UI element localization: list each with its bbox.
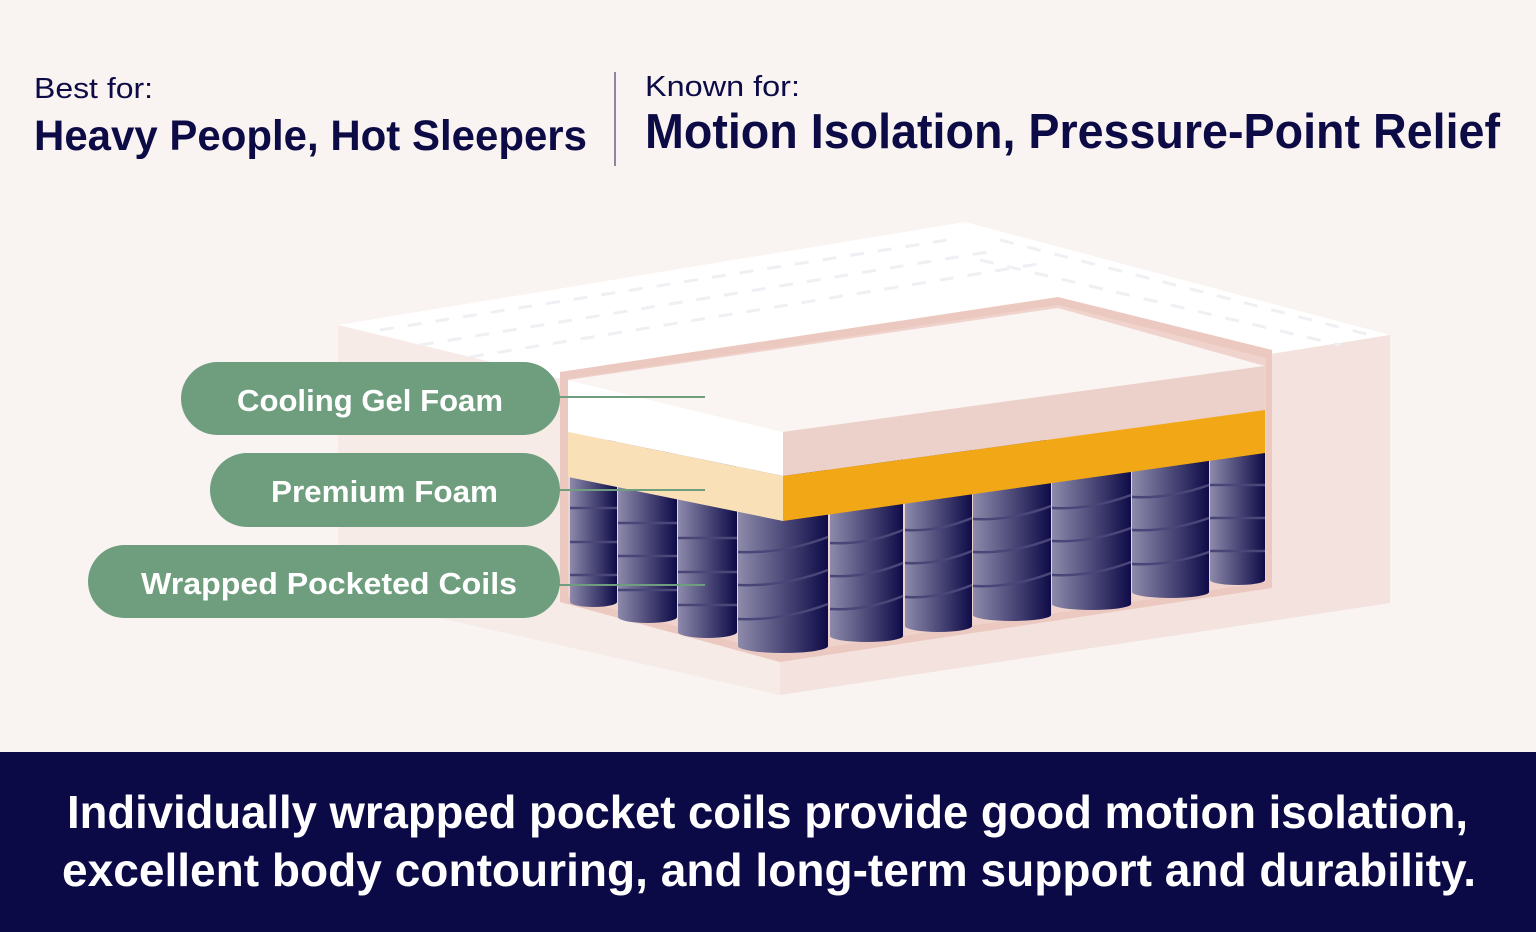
label: cooling gel foam: Cooling Gel Foam xyxy=(237,383,503,418)
header: best for: Best for: xyxy=(34,73,153,105)
header: known for: Motion Isolation, Pressure-Point Relief xyxy=(645,105,1501,159)
label: cooling gel foam xyxy=(181,362,705,435)
header: known for: Known for: xyxy=(645,71,800,103)
label: premium foam xyxy=(210,453,705,527)
mattress outer shell xyxy=(338,222,1390,695)
label: wrapped pocketed coils: Wrapped Pocketed Coils xyxy=(141,566,517,601)
bottom banner xyxy=(0,752,1536,932)
mattress illustration xyxy=(338,222,1390,695)
header: known for xyxy=(645,71,1501,159)
coils xyxy=(570,440,1265,653)
layer: premium foam xyxy=(568,410,1265,521)
header: best for: Heavy People, Hot Sleepers xyxy=(34,112,587,160)
label: premium foam: Premium Foam xyxy=(271,474,498,509)
header: best for xyxy=(34,73,587,160)
bottom banner: Individually wrapped pocket coils provide good motion isolation, xyxy=(67,786,1468,838)
label: wrapped pocketed coils xyxy=(88,545,705,618)
layer: cooling gel foam xyxy=(568,308,1265,476)
bottom banner: excellent body contouring, and long-term support and durability. xyxy=(62,844,1476,896)
cutout frame xyxy=(560,297,1272,662)
